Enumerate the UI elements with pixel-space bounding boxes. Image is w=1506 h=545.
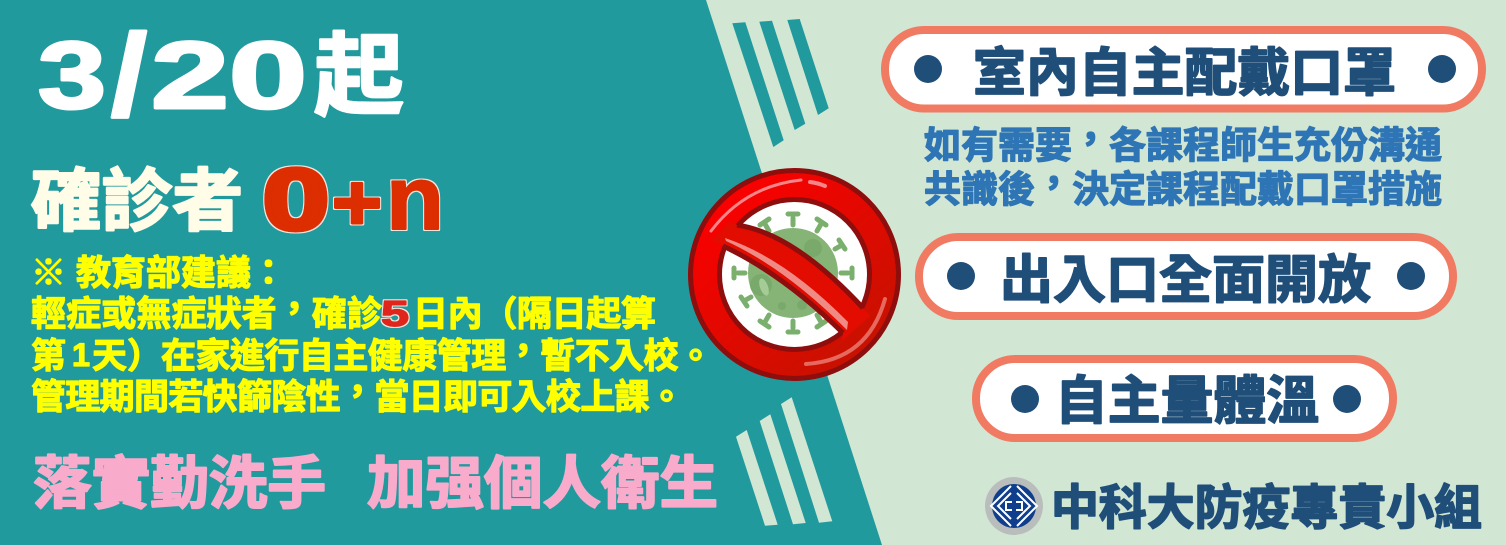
slogan: handwashing and hygiene	[33, 438, 718, 520]
text block: Ministry of Education advice	[31, 245, 713, 420]
text block: Ministry of Education advice: 第	[31, 328, 66, 379]
text block: Ministry of Education advice: ，	[506, 323, 541, 374]
icon: green virus	[734, 214, 852, 332]
pill: 室內自主配戴口罩	[885, 30, 1482, 108]
slogan: handwashing and hygiene: 加强個人衛生	[367, 438, 718, 520]
text block: mask note: 決定課程配戴口罩措施	[1072, 159, 1442, 213]
slogan: handwashing and hygiene: 落實勤洗手	[33, 438, 326, 520]
text block: Ministry of Education advice: 輕症或無症狀者	[31, 286, 277, 337]
icon: university logo	[985, 477, 1043, 535]
text block: Ministry of Education advice: 在家進行自主健康管理	[161, 328, 506, 379]
text block: Ministry of Education advice: 當日即可入校上課。	[374, 369, 684, 420]
pill: 自主量體溫: 自主量體溫	[1055, 359, 1319, 434]
heading: 確診者 0+n	[31, 146, 444, 249]
text block: Ministry of Education advice: ，	[340, 364, 375, 415]
text block: mask note: 如有需要	[924, 115, 1072, 169]
text block: Ministry of Education advice: 教育部建議：	[76, 245, 286, 296]
sign highlights	[711, 180, 885, 364]
text block: mask note: ，	[1035, 153, 1072, 207]
panel: teal left background	[0, 0, 882, 545]
text block: Ministry of Education advice: 暫不入校。	[540, 328, 713, 379]
title: 3/20起: 3	[38, 23, 106, 129]
title: 3/20起: /	[111, 10, 147, 140]
heading: 確診者 0+n: 0	[263, 152, 329, 248]
heading: 確診者 0+n: 確診者	[31, 146, 243, 245]
text block: Ministry of Education advice: ※	[31, 245, 66, 296]
title: 3/20起	[38, 3, 404, 140]
bottom light stripes	[736, 397, 832, 526]
title: 3/20起: 起	[314, 3, 404, 133]
text block: mask note: 各課程師生充份溝通	[1109, 115, 1442, 169]
text block: Ministry of Education advice: 1	[72, 337, 90, 373]
text block: mask note: 共識後	[924, 159, 1035, 213]
footer: team name: 中科大防疫專責小組	[1051, 468, 1482, 538]
heading: 確診者 0+n: +	[332, 158, 382, 246]
text block: mask note	[924, 109, 1442, 213]
icon: no virus prohibition sign	[690, 170, 898, 378]
text block: Ministry of Education advice: 天）	[92, 328, 162, 379]
text block: Ministry of Education advice: ，	[277, 281, 312, 332]
pill: 出入口全面開放: 出入口全面開放	[1000, 238, 1371, 313]
title: 3/20起: 20	[151, 23, 307, 129]
pill: 室內自主配戴口罩: 室內自主配戴口罩	[973, 31, 1396, 106]
prohibition bar	[712, 221, 870, 341]
text block: Ministry of Education advice: 管理期間若快篩陰性	[31, 369, 341, 420]
text block: Ministry of Education advice: 5	[381, 293, 409, 334]
heading: 確診者 0+n: n	[386, 149, 444, 249]
pill: 出入口全面開放	[919, 237, 1453, 316]
text block: Ministry of Education advice: 日內（隔日起算	[413, 286, 656, 337]
text block: mask note: ，	[1072, 109, 1109, 163]
text block: Ministry of Education advice: 確診	[312, 286, 382, 337]
pill: 自主量體溫	[976, 359, 1393, 438]
top teal stripes	[732, 19, 829, 147]
